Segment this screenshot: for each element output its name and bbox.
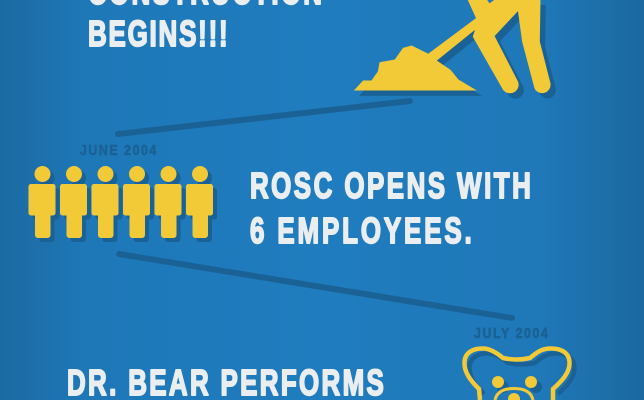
- bear eyes: [492, 376, 537, 388]
- heading: ROSC opens: ROSC OPENS WITH: [250, 166, 531, 206]
- bear shadow: [469, 353, 575, 394]
- bear outline: [464, 348, 570, 400]
- date label: June 2004: JUNE 2004: [80, 142, 157, 158]
- icon: worker shovelling: [355, 0, 555, 98]
- icon: six employees: [28, 166, 217, 242]
- figures: [28, 166, 213, 238]
- icon: bear face: [464, 348, 575, 400]
- heading: ROSC opens: [250, 166, 531, 251]
- date label: July 2004: JULY 2004: [474, 325, 548, 341]
- heading: ROSC opens: 6 EMPLOYEES.: [250, 211, 472, 251]
- heading: construction begins: BEGINS!!!: [88, 14, 228, 54]
- bear muzzle and nose: [495, 388, 533, 400]
- timeline connector: upper: [118, 101, 410, 134]
- heading: construction begins: [88, 0, 322, 54]
- timeline connector: lower: [119, 254, 512, 318]
- figure shadows: [32, 170, 217, 242]
